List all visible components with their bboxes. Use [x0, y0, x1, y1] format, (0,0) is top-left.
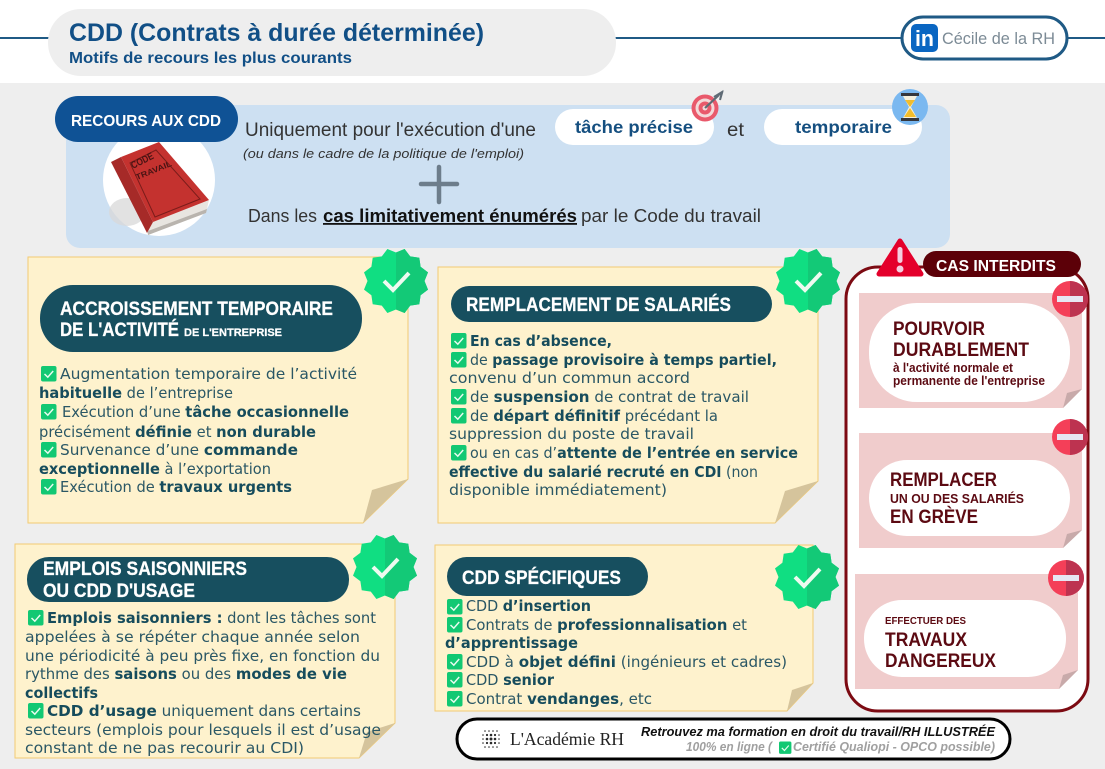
icon: no entry	[1052, 281, 1088, 317]
badge: recours aux CDD: RECOURS AUX CDD	[71, 113, 221, 130]
book illustration	[103, 124, 215, 236]
card: pourvoir durablement: POURVOIR	[893, 319, 985, 340]
heading: DE L'ENTREPRISE	[184, 327, 282, 339]
icon: target	[692, 92, 722, 122]
text: list: constant de ne pas recourir au CDI)	[25, 739, 304, 757]
promo subline: 100% en ligne (	[686, 740, 774, 754]
pill: temporaire: temporaire	[795, 117, 892, 137]
icon: green seal	[353, 535, 417, 599]
linkedin badge	[902, 17, 1067, 59]
pill: tâche précise	[555, 109, 714, 145]
pill: temporaire	[764, 109, 922, 145]
icon: warning triangle	[879, 241, 921, 274]
icon: académie dots	[482, 730, 500, 748]
footer banner	[457, 719, 1010, 759]
text: list: Exécution d’une tâche occasionnelle	[62, 403, 349, 421]
heading: DE L'ACTIVITÉ	[60, 319, 179, 341]
heading: ACCROISSEMENT TEMPORAIRE	[60, 299, 333, 320]
text: list: collectifs	[25, 684, 98, 702]
promo subline	[686, 740, 995, 754]
heading: cas interdits	[923, 251, 1081, 277]
text: cas limitativement énumérés: par le Code du travail	[581, 206, 761, 226]
book illustration: CODE	[129, 151, 156, 172]
text: list: de passage provisoire à temps partiel,	[470, 351, 777, 369]
card: remplacer: UN OU DES SALARIÉS	[890, 491, 1024, 506]
pill: tâche précise: tâche précise	[575, 117, 693, 137]
text: list: Augmentation temporaire de l’activité	[60, 365, 357, 383]
panel: remplacement de salariés	[438, 249, 840, 523]
text: list: Emplois saisonniers : dont les tâches sont	[47, 609, 376, 627]
book illustration: TRAVAIL	[134, 159, 173, 182]
card: remplacer	[859, 433, 1082, 548]
icon: green seal	[364, 249, 428, 313]
panel: emplois saisonniers	[15, 535, 417, 758]
text: list: de départ définitif précédant la	[470, 407, 718, 425]
text: list	[445, 597, 787, 708]
heading	[40, 285, 362, 352]
icon: hourglass	[892, 89, 928, 125]
text: list: disponible immédiatement)	[449, 481, 667, 499]
text: list: une périodicité à peu près fixe, en fonction du	[25, 647, 380, 665]
author name: Cécile de la RH	[942, 29, 1055, 48]
card: pourvoir durablement: DURABLEMENT	[893, 340, 1029, 361]
icon: linkedin	[911, 24, 938, 52]
text: list: rythme des saisons ou des modes de vie	[25, 665, 347, 683]
text: et: et	[727, 120, 745, 141]
text: list: CDD senior	[466, 671, 555, 689]
title pill	[48, 9, 616, 76]
text: list: Exécution de travaux urgents	[60, 478, 292, 496]
heading: REMPLACEMENT DE SALARIÉS	[466, 294, 731, 316]
text: list: exceptionnelle à l’exportation	[39, 460, 271, 478]
text: list: Contrat vendanges, etc	[466, 690, 652, 708]
text: list	[39, 365, 357, 496]
promo line: Retrouvez ma formation en droit du travail/RH ILLUSTRÉE	[641, 724, 996, 739]
panel: accroissement temporaire	[28, 249, 428, 523]
text: cas limitativement énumérés	[248, 206, 761, 226]
header band	[0, 0, 1105, 83]
text: list: suppression du poste de travail	[449, 425, 694, 443]
text: list: de suspension de contrat de travail	[470, 388, 749, 406]
icon: no entry	[1048, 560, 1084, 596]
icon: plus	[421, 167, 457, 202]
subtitle: Motifs de recours les plus courants	[69, 50, 352, 67]
text: list: CDD d’usage uniquement dans certains	[47, 702, 361, 720]
icon: green seal	[775, 545, 839, 609]
text: list: CDD d’insertion	[466, 597, 591, 615]
heading	[447, 557, 648, 596]
text: cas limitativement énumérés: Dans les	[248, 206, 317, 226]
panel: cas interdits	[846, 241, 1088, 711]
text: uniquement: Uniquement pour l'exécution d'une	[245, 120, 536, 141]
heading	[27, 557, 349, 602]
text: list: secteurs (emplois pour lesquels il est d’usage	[25, 721, 381, 739]
text: list: CDD à objet défini (ingénieurs et cadres)	[466, 653, 787, 671]
text: list: précisément définie et non durable	[39, 423, 316, 441]
heading: CDD SPÉCIFIQUES	[462, 567, 621, 589]
card: remplacer: EN GRÈVE	[890, 506, 978, 528]
card: pourvoir durablement: permanente de l'entreprise	[893, 374, 1045, 388]
icon: no entry	[1052, 419, 1088, 455]
card: travaux dangereux	[855, 574, 1078, 689]
text: list: d’apprentissage	[445, 634, 578, 652]
text: note: (ou dans le cadre de la politique de l'emploi)	[243, 146, 524, 161]
icon: linkedin: in	[915, 26, 934, 51]
card: travaux dangereux: EFFECTUER DES	[885, 615, 966, 627]
text: list: Survenance d’une commande	[60, 441, 298, 459]
card: pourvoir durablement	[859, 293, 1082, 408]
text: list: ou en cas d’attente de l’entrée en service	[470, 444, 798, 462]
promo subline: Certifié Qualiopi - OPCO possible)	[793, 740, 995, 754]
text: list: Contrats de professionnalisation et	[466, 616, 747, 634]
heading	[451, 286, 772, 322]
text: list: convenu d’un commun accord	[449, 369, 690, 387]
icon: green seal	[776, 249, 840, 313]
text: list: En cas d’absence,	[470, 332, 612, 350]
text: list: appelées à se répéter chaque année selon	[25, 628, 360, 646]
academy name: L'Académie RH	[510, 729, 624, 749]
card: travaux dangereux: DANGEREUX	[885, 651, 996, 672]
card: remplacer: REMPLACER	[890, 470, 997, 491]
badge: recours aux CDD	[55, 96, 238, 142]
panel: recours aux CDD	[55, 89, 950, 248]
heading: OU CDD D'USAGE	[43, 581, 195, 602]
title: CDD (Contrats à durée déterminée)	[69, 19, 484, 47]
text: list	[25, 609, 381, 757]
text: cas limitativement énumérés: cas limitativement énumérés	[323, 206, 577, 226]
card: pourvoir durablement: à l'activité normale et	[893, 361, 1014, 375]
heading: cas interdits: CAS INTERDITS	[936, 258, 1056, 275]
card: travaux dangereux: TRAVAUX	[885, 630, 967, 651]
text: list: habituelle de l’entreprise	[39, 384, 233, 402]
heading: EMPLOIS SAISONNIERS	[43, 559, 247, 580]
text: list: effective du salarié recruté en CDI (non	[449, 463, 758, 481]
panel: CDD spécifiques	[435, 545, 839, 711]
text: list	[449, 332, 798, 499]
